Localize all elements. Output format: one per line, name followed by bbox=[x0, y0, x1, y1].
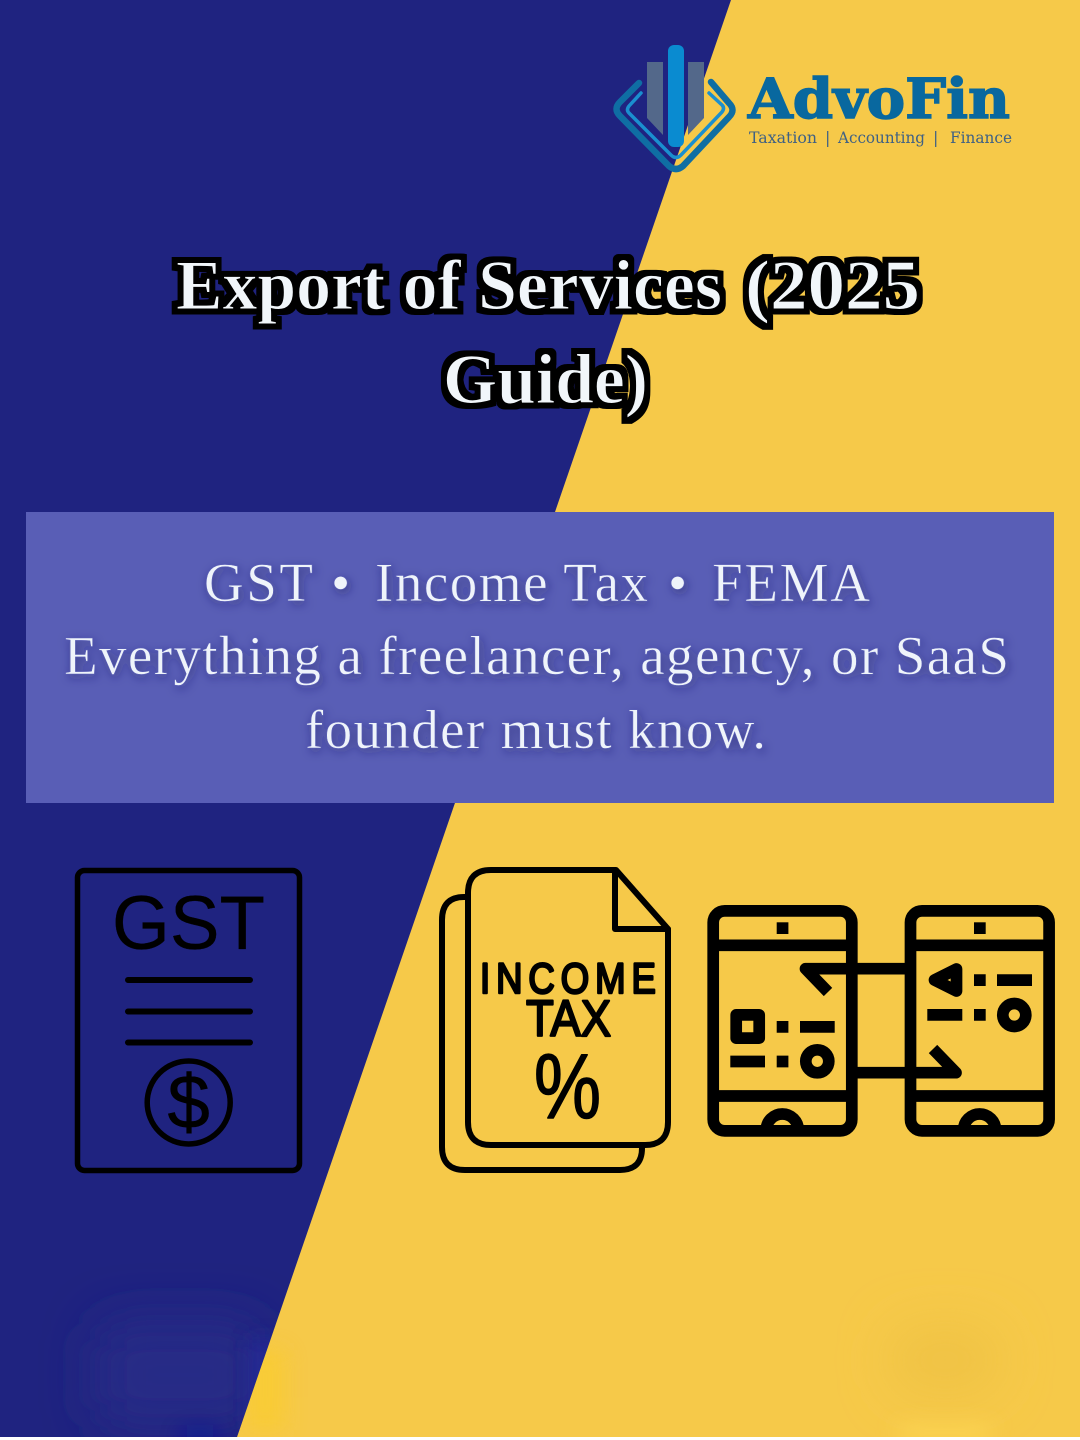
logo tagline: | bbox=[825, 128, 830, 147]
icon: GST document: GST bbox=[112, 881, 265, 966]
icon: income tax document: % bbox=[534, 1036, 601, 1138]
icon: two phones exchanging data bbox=[713, 911, 1049, 1131]
icon: income tax document: TAX bbox=[526, 990, 611, 1047]
left phone bbox=[713, 911, 852, 1131]
title: (2025 bbox=[745, 247, 920, 325]
subtitle text: founder must know. bbox=[305, 699, 766, 760]
subtitle text bbox=[64, 552, 1009, 760]
logo: AdvoFin bbox=[616, 45, 1012, 169]
logo icon: bars and diamond bbox=[616, 45, 732, 169]
arrow: left to right bbox=[856, 1049, 956, 1073]
logo tagline: | bbox=[933, 128, 938, 147]
subtitle text: • bbox=[668, 552, 687, 613]
arrow: right to left bbox=[806, 969, 906, 992]
subtitle text: Income Tax bbox=[375, 552, 648, 613]
logo wordmark: AdvoFin bbox=[747, 66, 1010, 131]
subtitle text: FEMA bbox=[712, 552, 870, 613]
logo tagline: Taxation bbox=[749, 128, 817, 147]
title: Guide) bbox=[443, 341, 648, 419]
background: blurred patches at the bottom bbox=[124, 1324, 288, 1437]
right phone bbox=[910, 911, 1049, 1131]
background: navy diagonal field bbox=[0, 0, 731, 1437]
logo tagline: Finance bbox=[950, 128, 1012, 147]
subtitle text: GST bbox=[204, 552, 313, 613]
logo tagline: Accounting bbox=[837, 128, 925, 147]
icon: GST document: $ bbox=[168, 1060, 210, 1145]
icon: income tax document bbox=[442, 870, 668, 1170]
panel: subtitle band bbox=[26, 512, 1054, 803]
title: Export of Services bbox=[176, 247, 722, 325]
title bbox=[176, 247, 920, 419]
logo tagline bbox=[749, 128, 1012, 147]
subtitle text: • bbox=[331, 552, 350, 613]
icon: GST document bbox=[78, 870, 300, 1170]
icon: income tax document: INCOME bbox=[480, 955, 662, 1003]
subtitle text: Everything a freelancer, agency, or SaaS bbox=[64, 625, 1009, 686]
